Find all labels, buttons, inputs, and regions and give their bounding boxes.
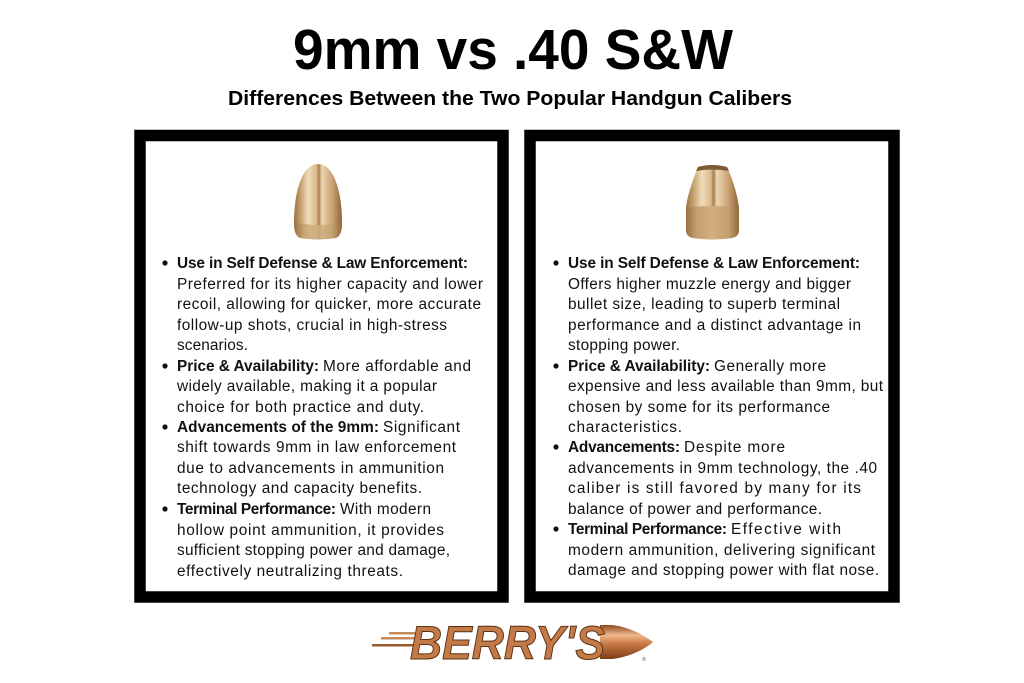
panel: 9mm	[140, 136, 503, 597]
text: 9mm bullet list: With modern	[340, 501, 431, 518]
subtitle: Differences Between the Two Popular Handgun Calibers	[228, 88, 792, 110]
text: 9mm bullet list: Price & Availability:	[177, 358, 319, 375]
text: 9mm bullet list: Advancements of the 9mm:	[177, 419, 379, 436]
text: 9mm bullet list: More affordable and	[323, 358, 471, 375]
icon: .40 flat nose bullet	[686, 165, 739, 240]
logo: Berry's: ®	[642, 656, 646, 663]
text: 9mm bullet list: widely available, making it a popular	[176, 378, 437, 395]
text: .40 bullet list: Advancements:	[568, 439, 680, 456]
text: .40 bullet list: Despite more	[684, 439, 785, 456]
text: 9mm bullet list: due to advancements in ammunition	[177, 460, 444, 477]
text: .40 bullet list: modern ammunition, delivering significant	[568, 542, 876, 559]
text: 9mm bullet list: recoil, allowing for quicker, more accurate	[177, 296, 481, 313]
text: .40 bullet list: chosen by some for its performance	[568, 399, 830, 416]
text: .40 bullet list	[553, 255, 884, 579]
text: .40 bullet list: damage and stopping power with flat nose.	[568, 562, 879, 579]
panel: .40 S&W	[530, 136, 894, 597]
text: 9mm bullet list	[162, 255, 483, 580]
text: 9mm bullet list: technology and capacity benefits.	[177, 480, 422, 497]
text: .40 bullet list: Generally more	[714, 358, 826, 375]
title: 9mm vs .40 S&W	[293, 18, 733, 82]
text: .40 bullet list: stopping power.	[568, 337, 680, 354]
text: 9mm bullet list: shift towards 9mm in law enforcement	[177, 439, 457, 456]
text: 9mm bullet list: Significant	[383, 419, 461, 436]
text: 9mm bullet list: choice for both practice and duty.	[177, 399, 424, 416]
text: .40 bullet list: characteristics.	[568, 419, 682, 436]
text: .40 bullet list: Use in Self Defense & Law Enforcement:	[568, 255, 860, 272]
text: 9mm bullet list: Terminal Performance:	[177, 501, 336, 518]
text: .40 bullet list: Price & Availability:	[568, 358, 710, 375]
text: .40 bullet list: bullet size, leading to superb terminal	[568, 296, 840, 313]
text: 9mm bullet list: follow-up shots, crucial in high-stress	[177, 317, 447, 334]
text: .40 bullet list: caliber is still favored by many for its	[568, 480, 861, 497]
text: 9mm bullet list: scenarios.	[177, 337, 248, 354]
icon: 9mm round nose bullet	[294, 164, 342, 240]
logo: Berry's: BERRY'S	[410, 616, 605, 669]
text: 9mm bullet list: hollow point ammunition, it provides	[177, 522, 444, 539]
text: .40 bullet list: Effective with	[731, 521, 841, 538]
text: .40 bullet list: Terminal Performance:	[568, 521, 727, 538]
text: .40 bullet list: advancements in 9mm technology, the .40	[568, 460, 877, 477]
text: .40 bullet list: Offers higher muzzle energy and bigger	[568, 276, 851, 293]
text: 9mm bullet list: sufficient stopping power and damage,	[177, 542, 450, 559]
text: 9mm bullet list: Use in Self Defense & Law Enforcement:	[177, 255, 468, 272]
text: 9mm bullet list: Preferred for its higher capacity and lower	[177, 276, 483, 293]
text: .40 bullet list: performance and a distinct advantage in	[568, 317, 861, 334]
text: 9mm bullet list: effectively neutralizing threats.	[177, 563, 403, 580]
text: .40 bullet list: balance of power and performance.	[568, 501, 822, 518]
text: .40 bullet list: expensive and less available than 9mm, but	[568, 378, 884, 395]
